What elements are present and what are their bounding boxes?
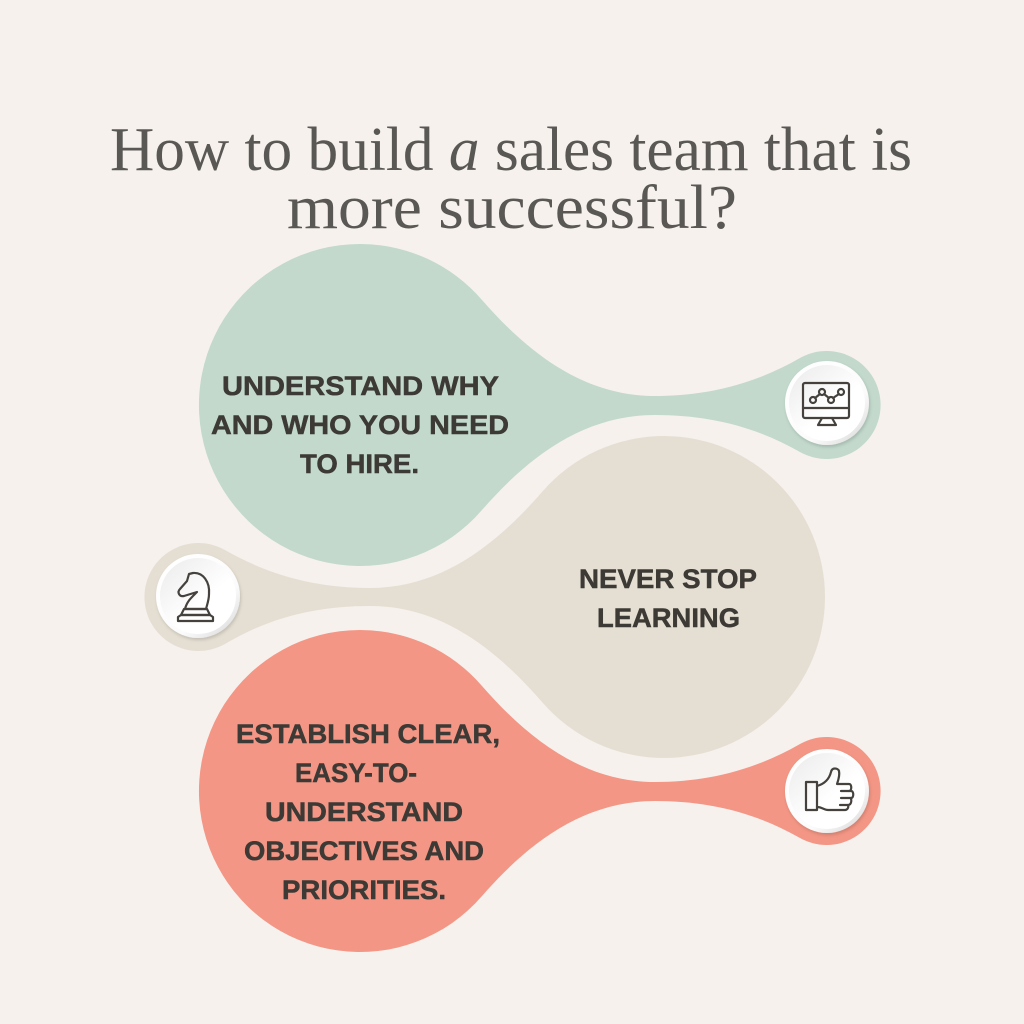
blob text: UNDERSTAND WHY: [222, 371, 499, 401]
coral blob shape: [199, 630, 881, 952]
panel: understand why and who: [199, 244, 881, 566]
blob text: [211, 371, 509, 479]
blob text: UNDERSTAND: [265, 797, 463, 827]
blob text: LEARNING: [597, 603, 740, 633]
blob text: EASY-TO-: [295, 758, 417, 788]
panel: establish clear objectives: [199, 630, 881, 952]
beige blob shape: [144, 436, 825, 758]
icon: chess knight: [156, 554, 240, 638]
title: more successful?: [287, 174, 737, 242]
blob text: ESTABLISH CLEAR,: [236, 719, 500, 749]
blob text: OBJECTIVES AND: [244, 836, 484, 866]
panel: never stop learning: [144, 436, 825, 758]
blob text: AND WHO YOU NEED: [211, 410, 509, 440]
title: [110, 116, 912, 242]
blob text: PRIORITIES.: [282, 875, 446, 905]
green blob shape: [199, 244, 881, 566]
blob text: [579, 564, 757, 633]
icon: monitor with line chart: [785, 361, 869, 445]
blob text: [236, 719, 500, 905]
blob text: NEVER STOP: [579, 564, 757, 594]
title: How to build a sales team that is: [110, 116, 912, 184]
blob text: TO HIRE.: [300, 449, 419, 479]
icon: thumbs up: [785, 749, 869, 833]
